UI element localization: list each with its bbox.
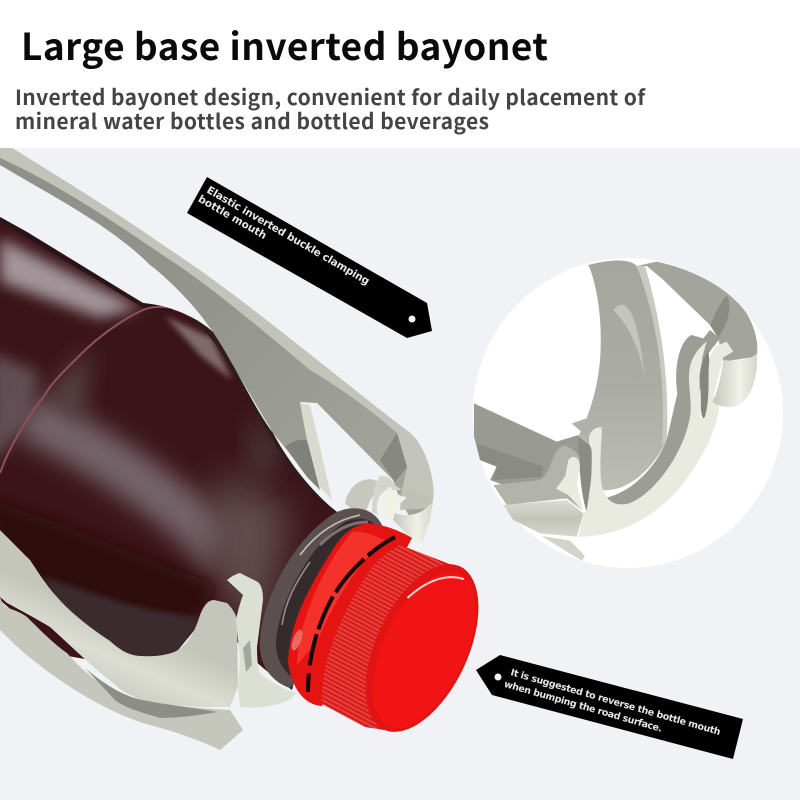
callout tag: elastic buckle [187,177,432,338]
lower hook plate [227,573,297,708]
callout tag: elastic buckle: Elastic inverted buckle clamping [204,184,372,288]
bottle neck glass [260,508,382,688]
detail circle: close-up of bayonet [473,258,783,568]
knurled cap side [322,545,460,730]
bottle top rim band [0,217,173,308]
slit in cream plate [700,350,709,418]
subtitle [15,82,646,136]
top right arm [637,262,757,362]
shoulder seam [0,307,173,473]
right bracket [713,353,757,407]
callout tag: road surface advice [476,655,743,759]
cap face [342,547,502,749]
shadow under band [85,668,217,718]
upper band [0,530,238,707]
callout tag: road surface advice: It is suggested to reverse the bottle mouth [509,667,722,738]
upper hook cluster [345,476,433,543]
left bracket [493,445,582,510]
lower strip [0,597,243,750]
cream front plate [578,342,733,537]
upper holder arm [0,148,433,540]
callout tag: elastic buckle: bottle mouth [196,193,269,242]
callout tag: road surface advice: when bumping the road surface. [503,679,663,735]
title: Large base inverted bayonet [21,17,548,71]
subtitle: mineral water bottles and bottled beverages [15,106,489,136]
tail [542,536,585,561]
bottle light reflections [0,238,290,665]
lower holder arm [0,530,297,750]
main illustration: bottle in holder [0,148,502,750]
left arm [474,403,582,485]
red bottle cap [288,524,502,749]
rear hook and strip [602,330,720,507]
inner curved wall [578,261,667,490]
cap band with slits [288,524,412,706]
subtitle: Inverted bayonet design, convenient for daily placement of [15,82,646,112]
bottle body [0,200,350,700]
